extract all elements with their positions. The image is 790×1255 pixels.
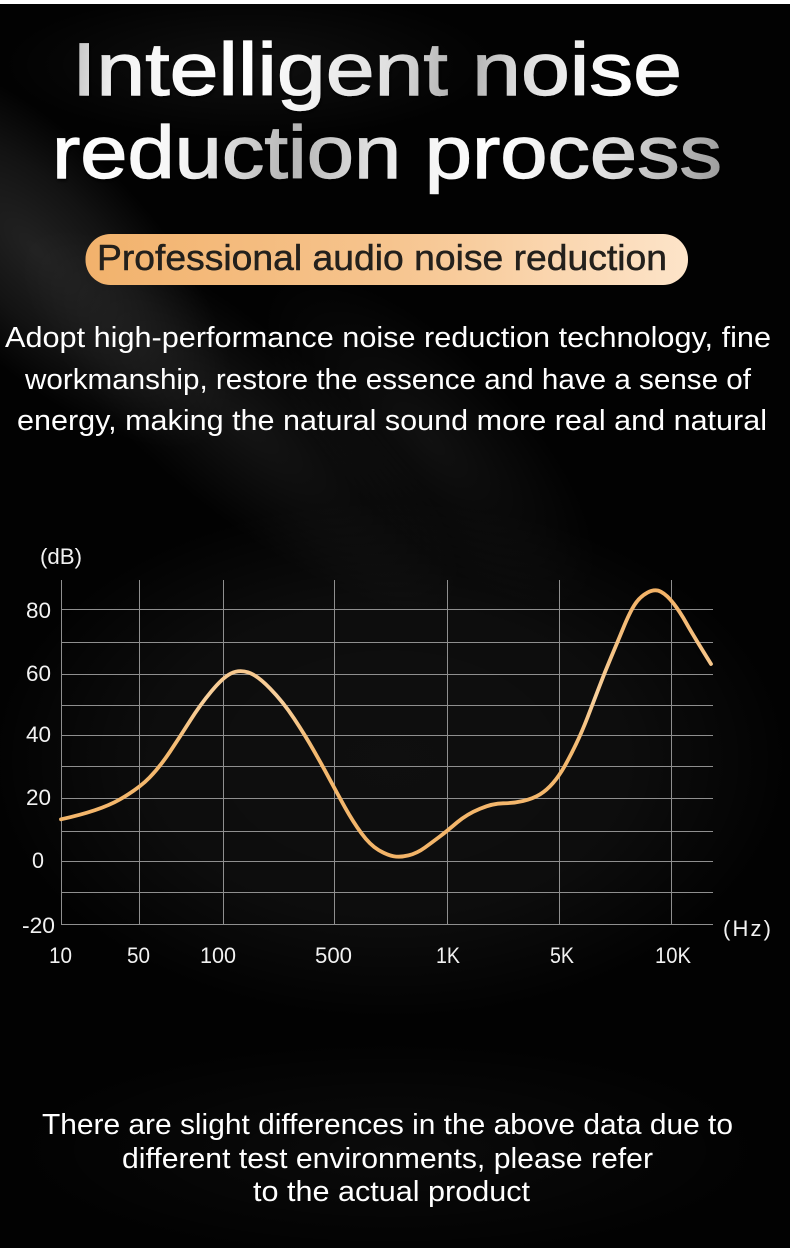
footnote text [42,1109,733,1208]
footnote text: There are slight differences in the above data due to [42,1109,733,1141]
x axis labels: 10 [49,943,72,968]
x axis labels: 100 [200,943,236,968]
pill label: Professional audio noise reduction [97,237,667,278]
description text [5,322,771,437]
x axis labels: (Hz) [723,916,771,941]
y axis labels: 80 [26,598,51,623]
subtitle pill [86,234,688,285]
y axis labels [22,544,82,938]
y axis labels: 20 [26,785,51,810]
x axis labels: 5K [550,943,574,968]
description text: energy, making the natural sound more real and natural [17,405,767,437]
y axis labels: 60 [26,661,51,686]
x axis labels: 1K [436,943,460,968]
title line 1: Intelligent noise [72,28,682,111]
y axis labels: 0 [32,848,44,873]
chart grid [61,580,713,924]
x axis labels: 50 [127,943,150,968]
description text: workmanship, restore the essence and have a sense of [24,364,752,396]
x axis labels: 500 [315,943,352,968]
y axis labels: 40 [26,722,51,747]
x axis labels: 10K [655,943,691,968]
frequency response chart [22,544,771,968]
footnote text: to the actual product [253,1176,530,1208]
response curve [61,590,711,857]
footnote text: different test environments, please refer [122,1143,653,1175]
description text: Adopt high-performance noise reduction technology, fine [5,322,771,354]
title line 2: reduction process [52,111,722,194]
y axis labels: (dB) [40,544,82,569]
x axis labels [49,916,771,968]
y axis labels: -20 [22,913,55,938]
title [52,28,722,194]
